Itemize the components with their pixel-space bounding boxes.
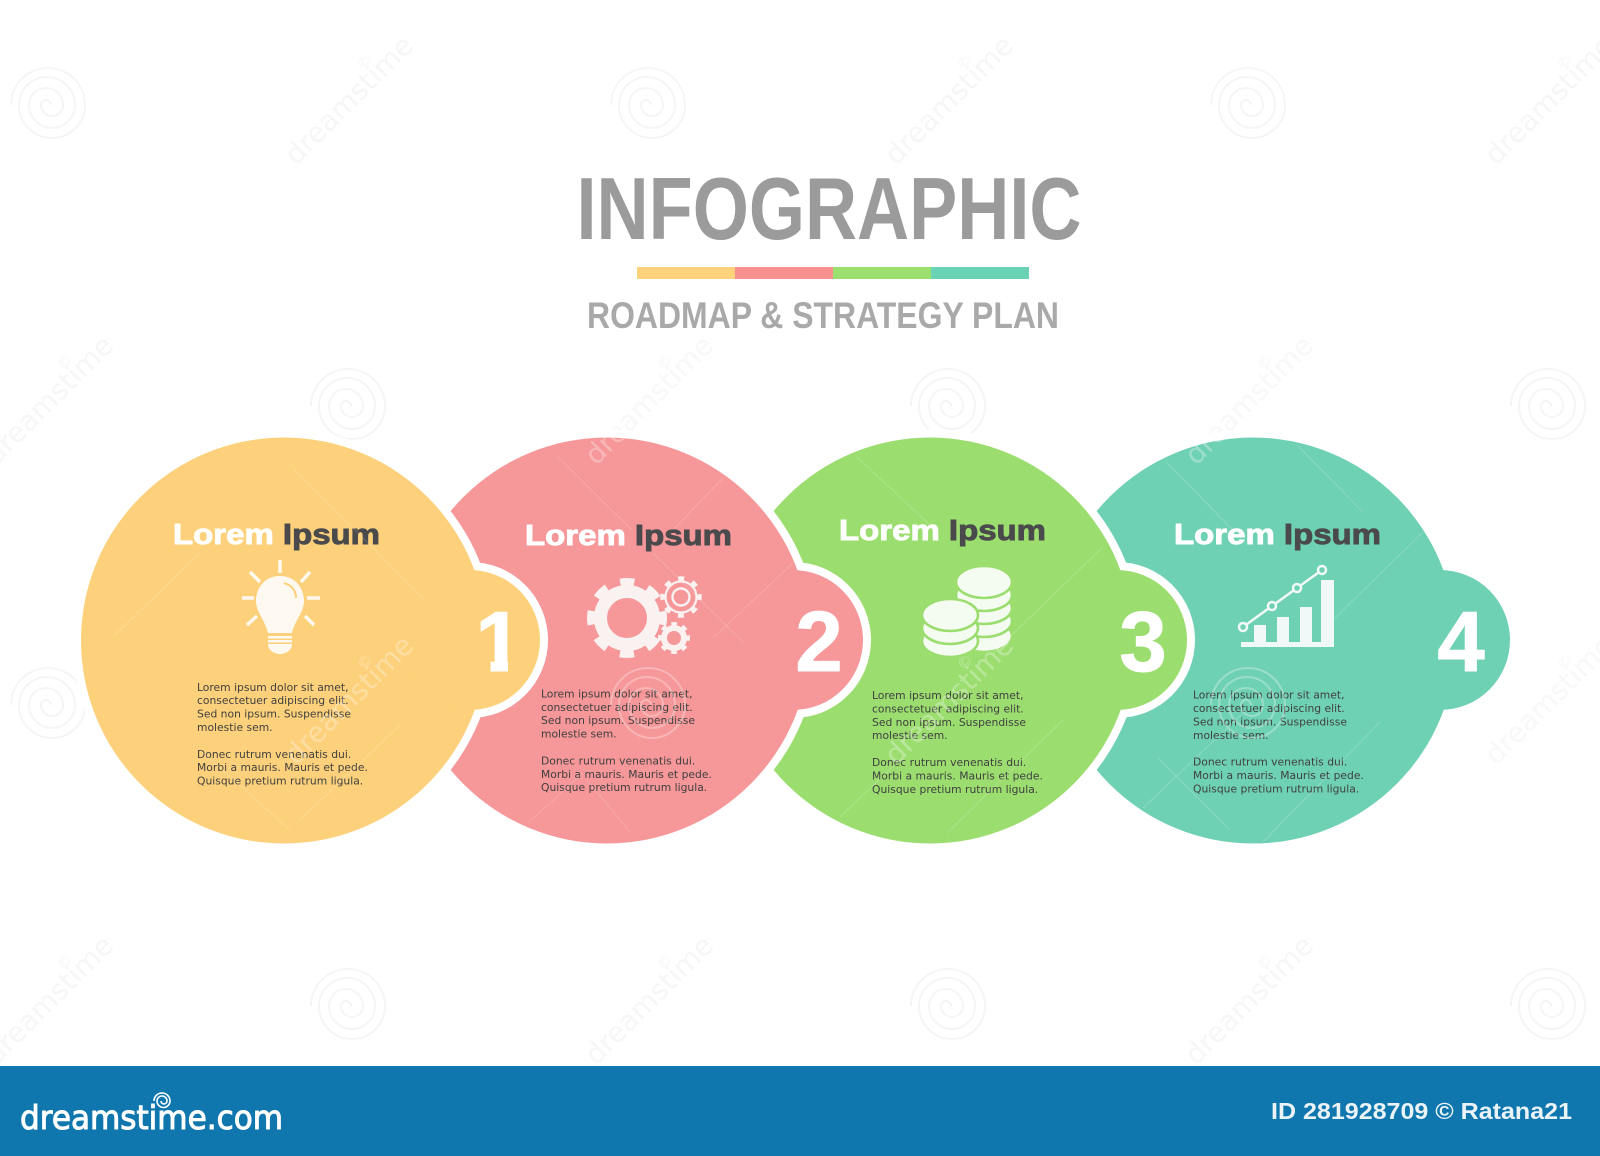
body text 1: Sed non ipsum. Suspendisse bbox=[197, 708, 351, 720]
watermark overlay bbox=[113, 323, 1600, 842]
body text 1: molestie sem. bbox=[197, 721, 273, 734]
background watermarks: dreamstime bbox=[1178, 329, 1320, 471]
background watermarks: © bbox=[53, 950, 77, 974]
body text 3: Sed non ipsum. Suspendisse bbox=[872, 716, 1026, 729]
background watermarks: dreamstime bbox=[878, 629, 1020, 771]
icon: coin stacks bbox=[922, 566, 1012, 657]
body text 2: Morbi a mauris. Mauris et pede. bbox=[541, 768, 712, 781]
background watermarks: © bbox=[653, 950, 677, 974]
body text 3: consectetuer adipiscing elit. bbox=[872, 702, 1024, 716]
body text 4: Sed non ipsum. Suspendisse bbox=[1193, 716, 1347, 728]
body text 3 bbox=[872, 689, 1043, 796]
body text 4: Lorem ipsum dolor sit amet, bbox=[1193, 688, 1345, 702]
background watermarks: © bbox=[1553, 650, 1577, 674]
body text 4: Quisque pretium rutrum ligula. bbox=[1193, 782, 1359, 796]
background watermarks: dreamstime bbox=[1178, 929, 1320, 1071]
body text 1: Lorem ipsum dolor sit amet, bbox=[197, 681, 349, 694]
body text 2: molestie sem. bbox=[541, 728, 617, 740]
colour bar divider bbox=[637, 267, 1029, 279]
title: INFOGRAPHIC bbox=[576, 159, 1082, 258]
body text 1: Donec rutrum venenatis dui. bbox=[197, 748, 351, 761]
body text 3: Lorem ipsum dolor sit amet, bbox=[872, 689, 1024, 702]
footer band bbox=[0, 1066, 1600, 1156]
lower small gear bbox=[660, 624, 688, 652]
icon: gears bbox=[591, 578, 700, 654]
watermark overlay: © bbox=[653, 350, 677, 374]
background watermarks: dreamstime bbox=[578, 929, 720, 1071]
background watermarks: © bbox=[1253, 950, 1277, 974]
body text 1 bbox=[197, 681, 368, 788]
watermark overlay: © bbox=[953, 650, 977, 674]
body text 3: Morbi a mauris. Mauris et pede. bbox=[872, 770, 1043, 782]
background watermarks: © bbox=[53, 350, 77, 374]
body text 3: molestie sem. bbox=[872, 729, 948, 742]
body text 4: consectetuer adipiscing elit. bbox=[1193, 702, 1345, 715]
body text 2: Donec rutrum venenatis dui. bbox=[541, 754, 695, 768]
panel 4: teal circle with tab bbox=[1042, 430, 1518, 852]
watermark overlay: © bbox=[353, 650, 377, 674]
background watermarks: © bbox=[653, 350, 677, 374]
background watermarks: © bbox=[353, 650, 377, 674]
background watermarks: dreamstime bbox=[878, 29, 1020, 171]
background watermarks: © bbox=[1253, 350, 1277, 374]
number 3: 3 bbox=[1119, 595, 1167, 690]
heading 1: Lorem Ipsum bbox=[173, 519, 380, 551]
background watermarks: © bbox=[953, 650, 977, 674]
body text 4 bbox=[1193, 688, 1364, 796]
background watermarks: © bbox=[1553, 50, 1577, 74]
panel 1: yellow circle with tab bbox=[73, 430, 548, 852]
icon: light bulb bbox=[242, 560, 320, 654]
number 4: 4 bbox=[1437, 595, 1485, 690]
body text 3: Quisque pretium rutrum ligula. bbox=[872, 783, 1038, 796]
body text 4: molestie sem. bbox=[1193, 729, 1269, 742]
watermark overlay: dreamstime bbox=[278, 629, 420, 771]
body text 2: Lorem ipsum dolor sit amet, bbox=[541, 688, 693, 700]
background watermarks: dreamstime bbox=[278, 629, 420, 771]
panel 2: red circle with tab bbox=[396, 430, 871, 852]
body text 1: consectetuer adipiscing elit. bbox=[197, 694, 349, 707]
watermark overlay: dreamstime bbox=[1178, 329, 1320, 471]
watermark overlay: © bbox=[1253, 350, 1277, 374]
watermark overlay: dreamstime bbox=[578, 329, 720, 471]
subtitle: ROADMAP & STRATEGY PLAN bbox=[587, 294, 1059, 336]
heading 2: Lorem Ipsum bbox=[525, 520, 732, 552]
large gear bbox=[591, 582, 663, 654]
body text 2: Sed non ipsum. Suspendisse bbox=[541, 714, 695, 727]
footer logo: dreamstime.com bbox=[20, 1098, 283, 1137]
panel 3: green circle with tab bbox=[719, 430, 1195, 852]
heading 3: Lorem Ipsum bbox=[839, 515, 1046, 547]
upper small gear bbox=[662, 578, 700, 616]
footer image id and credit: ID 281928709 © Ratana21 bbox=[1271, 1098, 1572, 1124]
body text 1: Quisque pretium rutrum ligula. bbox=[197, 774, 363, 788]
body text 2: consectetuer adipiscing elit. bbox=[541, 701, 693, 714]
body text 1: Morbi a mauris. Mauris et pede. bbox=[197, 761, 368, 774]
body text 2 bbox=[541, 688, 712, 794]
body text 3: Donec rutrum venenatis dui. bbox=[872, 756, 1026, 769]
number 2: 2 bbox=[795, 595, 843, 690]
background watermarks: © bbox=[953, 50, 977, 74]
watermark overlay: dreamstime bbox=[878, 629, 1020, 771]
icon: growth chart bbox=[1239, 566, 1334, 647]
watermark overlay: © bbox=[1553, 650, 1577, 674]
body text 4: Morbi a mauris. Mauris et pede. bbox=[1193, 769, 1364, 782]
number 1: 1 bbox=[475, 595, 523, 690]
heading 4: Lorem Ipsum bbox=[1174, 519, 1381, 551]
body text 2: Quisque pretium rutrum ligula. bbox=[541, 781, 707, 794]
background watermarks: dreamstime bbox=[278, 29, 420, 171]
background watermarks: dreamstime bbox=[578, 329, 720, 471]
body text 4: Donec rutrum venenatis dui. bbox=[1193, 756, 1347, 768]
background watermarks: © bbox=[353, 50, 377, 74]
